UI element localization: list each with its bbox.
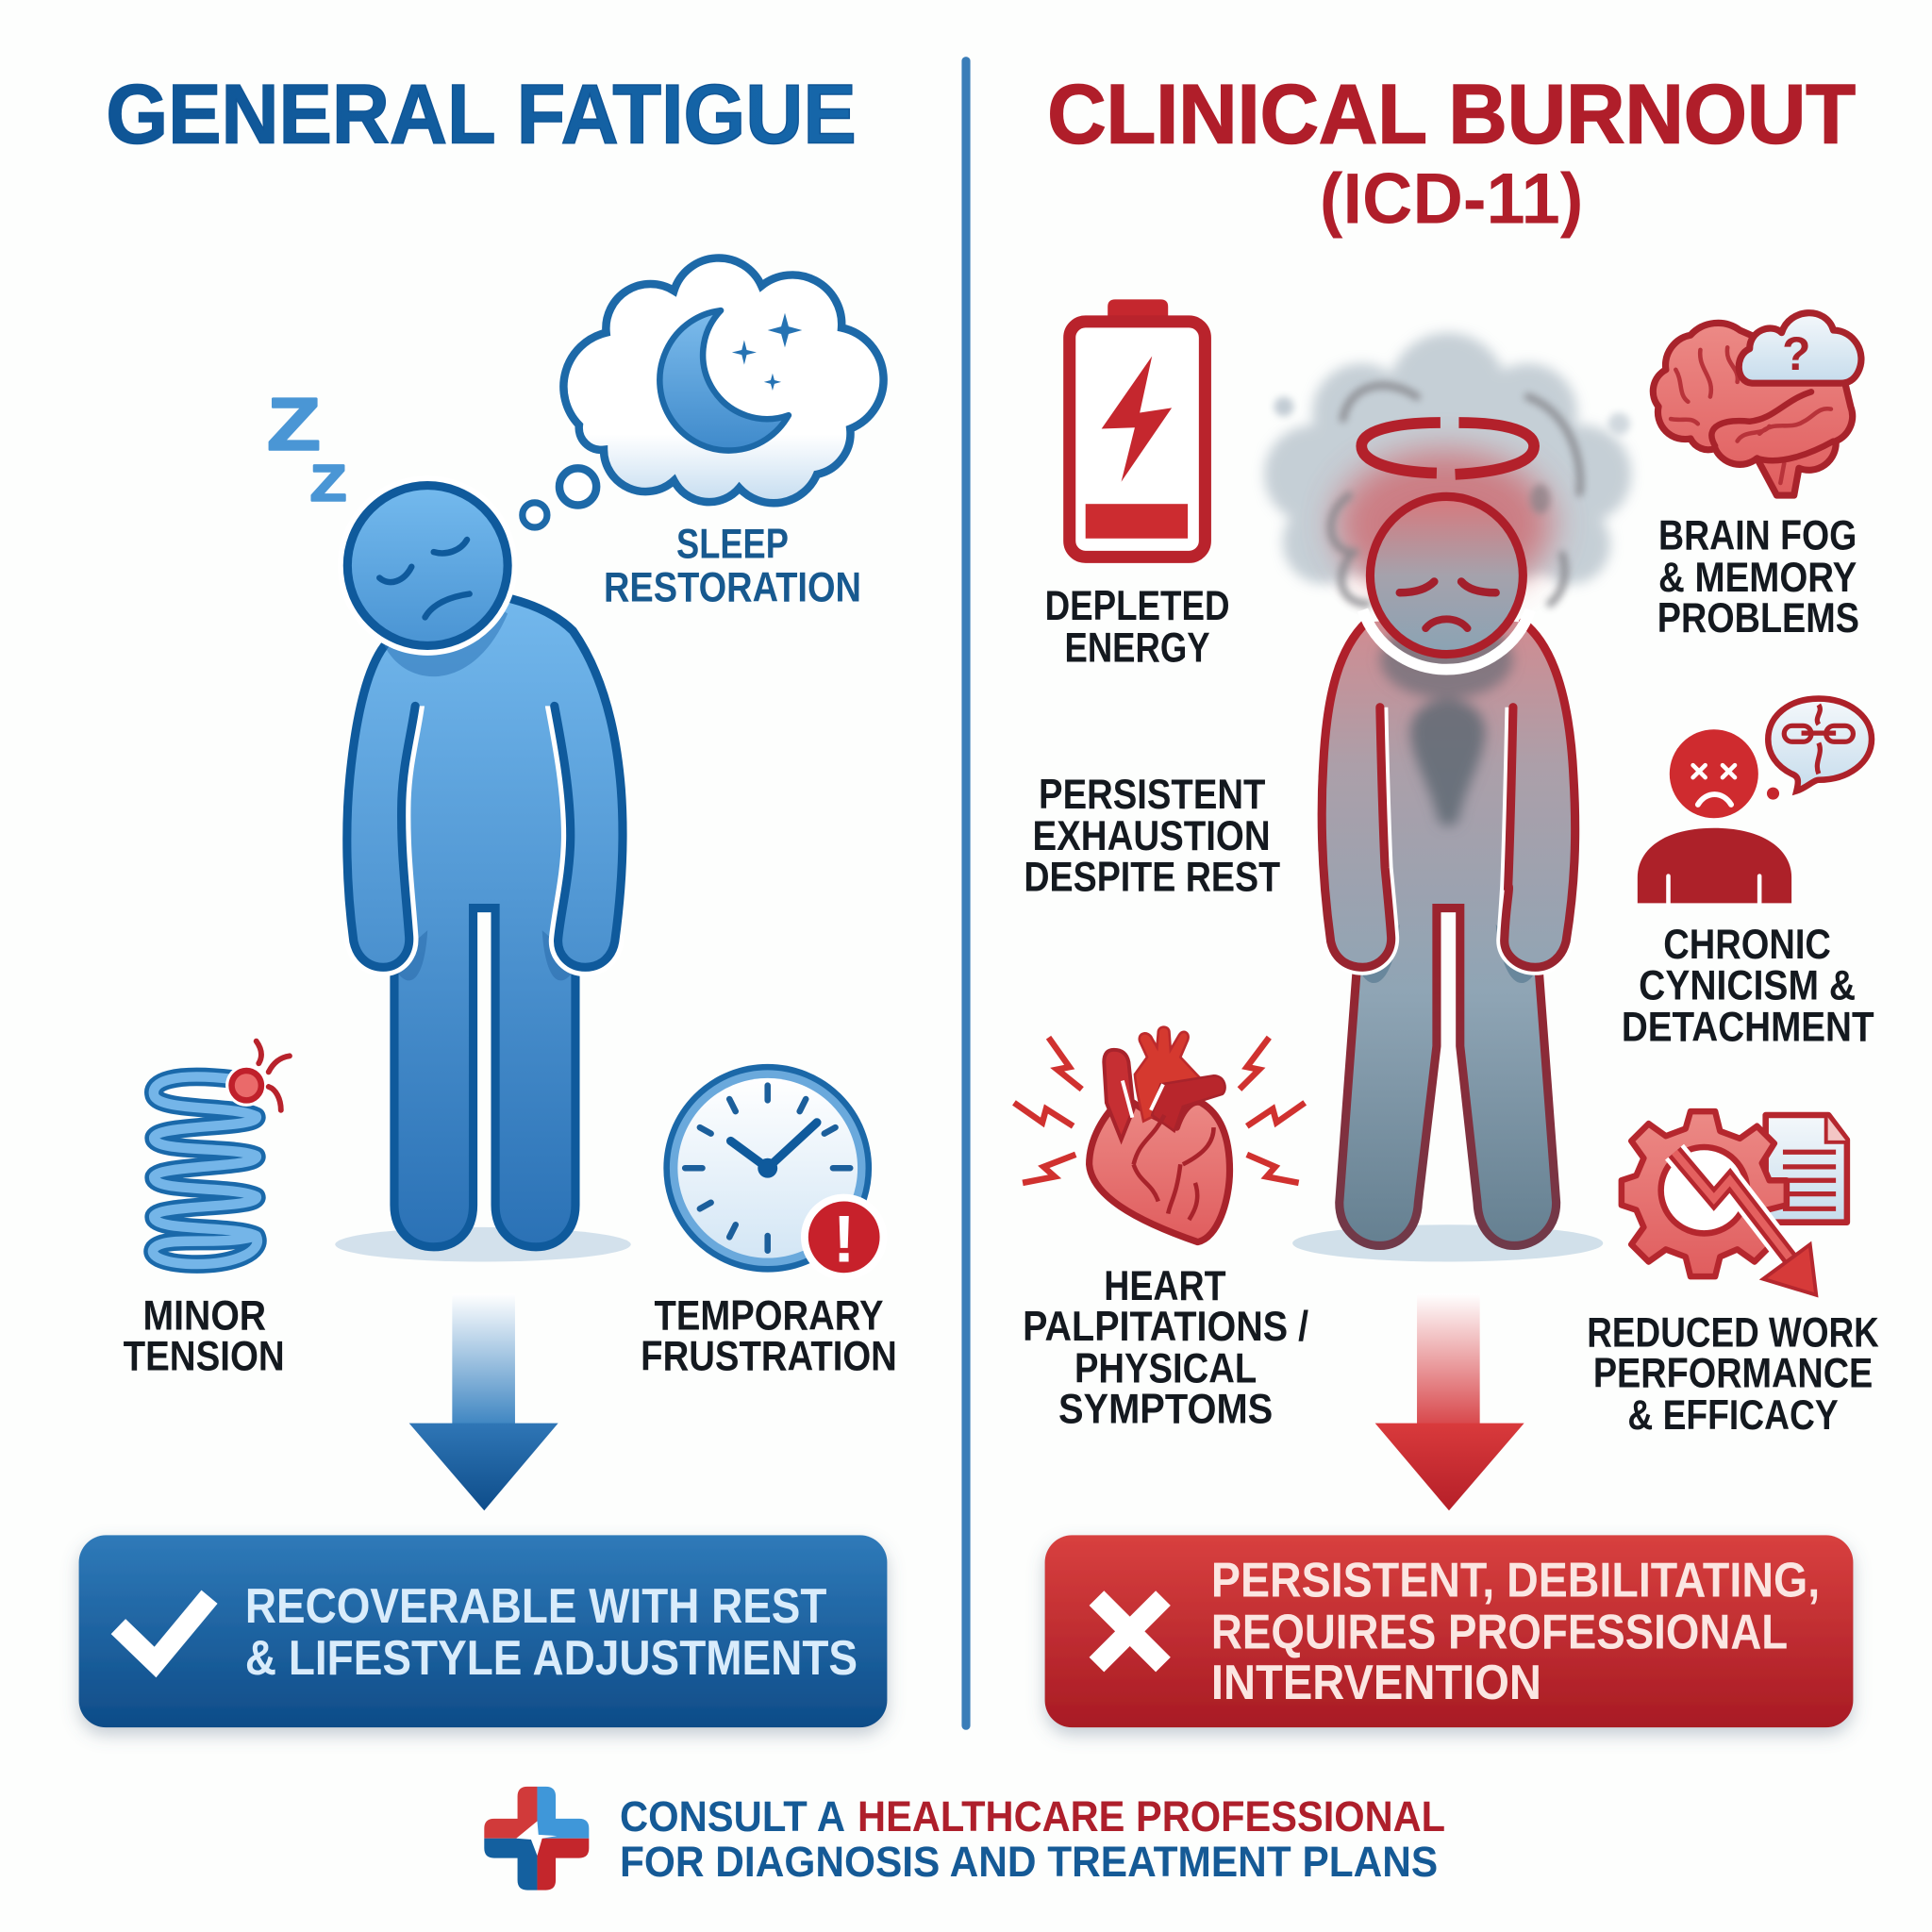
- red tension spot: [225, 1041, 290, 1110]
- head: [338, 475, 518, 656]
- falling arrow: [1674, 1152, 1791, 1260]
- label: persistent exhaustion: EXHAUSTION: [1033, 813, 1271, 859]
- recoverable text: [245, 1579, 858, 1686]
- icon: cynical person with broken chain: [1638, 699, 1872, 903]
- label: temporary frustration: TEMPORARY: [655, 1292, 883, 1339]
- label: persistent exhaustion: PERSISTENT: [1039, 772, 1265, 818]
- label: temporary frustration: FRUSTRATION: [641, 1333, 897, 1379]
- label: chronic cynicism and detachment: [1622, 922, 1874, 1051]
- fog cloud with question mark: ?: [1782, 327, 1810, 380]
- icon: x mark: [1096, 1598, 1163, 1665]
- document: [1766, 1115, 1847, 1223]
- icon: broken gear, document and falling arrow: [1622, 1111, 1847, 1295]
- persistent text: REQUIRES PROFESSIONAL: [1211, 1606, 1788, 1660]
- label: persistent exhaustion: DESPITE REST: [1024, 854, 1280, 900]
- label: heart palpitations: SYMPTOMS: [1058, 1387, 1273, 1433]
- icon: battery: [1070, 299, 1205, 557]
- icon: zzz sleep letters: Z: [267, 383, 321, 466]
- icon: brain with fog: [1653, 313, 1861, 495]
- label: heart palpitations: [1023, 1263, 1308, 1433]
- label: sleep restoration: [604, 522, 861, 610]
- label: brain fog and memory problems: BRAIN FOG: [1658, 513, 1857, 559]
- label: depleted energy: DEPLETED: [1045, 583, 1230, 629]
- label: brain fog and memory problems: [1657, 513, 1859, 641]
- label: depleted energy: ENERGY: [1064, 625, 1210, 671]
- label: brain fog and memory problems: & MEMORY: [1658, 555, 1857, 601]
- label: chronic cynicism and detachment: DETACHMENT: [1622, 1005, 1874, 1051]
- label: reduced work performance: PERFORMANCE: [1593, 1351, 1873, 1397]
- label: chronic cynicism and detachment: CHRONIC: [1663, 922, 1831, 968]
- center divider: [961, 57, 971, 1730]
- label: reduced work performance: [1587, 1310, 1879, 1439]
- spinning ring: [1361, 423, 1534, 475]
- speech bubble: [1768, 699, 1872, 791]
- label: persistent exhaustion: [1024, 772, 1280, 900]
- label: chronic cynicism and detachment: CYNICISM &: [1639, 962, 1856, 1008]
- persistent text: INTERVENTION: [1211, 1656, 1541, 1710]
- title: clinical burnout: [1047, 68, 1856, 239]
- footer text: CONSULT A: [620, 1792, 845, 1840]
- gear: [1622, 1111, 1787, 1276]
- panel: recoverable outcome: [79, 1535, 887, 1727]
- alert badge: !: [833, 1201, 855, 1275]
- label: reduced work performance: & EFFICACY: [1627, 1392, 1839, 1439]
- icon: medical cross: [484, 1787, 589, 1890]
- title: general fatigue: GENERAL FATIGUE: [106, 68, 857, 161]
- footer text: HEALTHCARE PROFESSIONAL: [858, 1792, 1445, 1840]
- label: brain fog and memory problems: PROBLEMS: [1657, 595, 1859, 641]
- figure: fatigued blue person: [338, 475, 623, 1247]
- fog cloud with question mark: [1739, 313, 1861, 383]
- persistent text: [1211, 1554, 1820, 1710]
- icon: check mark: [118, 1597, 209, 1662]
- label: heart palpitations: PHYSICAL: [1074, 1345, 1257, 1391]
- panel: persistent outcome: [1045, 1535, 1853, 1727]
- label: heart palpitations: PALPITATIONS /: [1023, 1304, 1308, 1350]
- alert badge: [801, 1194, 887, 1280]
- label: minor tension: [124, 1292, 285, 1379]
- footer text: [620, 1792, 1445, 1886]
- label: minor tension: MINOR: [143, 1292, 266, 1339]
- blue ground shadow: [335, 1227, 631, 1261]
- footer text: FOR DIAGNOSIS AND TREATMENT PLANS: [620, 1838, 1438, 1886]
- head: [1363, 496, 1530, 670]
- label: minor tension: TENSION: [124, 1333, 285, 1379]
- icon: zzz sleep letters: Z: [310, 456, 346, 511]
- title: clinical burnout: CLINICAL BURNOUT: [1047, 68, 1856, 161]
- icon: anatomical heart with bolts: [1014, 1027, 1305, 1242]
- label: heart palpitations: HEART: [1104, 1263, 1226, 1309]
- arrow: blue down: [409, 1293, 558, 1510]
- icon: sleep thought cloud: [523, 258, 884, 527]
- chest shadow: [1380, 620, 1513, 825]
- label: sleep restoration: SLEEP: [676, 522, 789, 568]
- label: sleep restoration: RESTORATION: [604, 564, 861, 610]
- label: temporary frustration: [641, 1292, 897, 1379]
- recoverable text: & LIFESTYLE ADJUSTMENTS: [245, 1631, 858, 1686]
- title: clinical burnout: (ICD-11): [1320, 158, 1583, 239]
- figure: burned-out person: [1322, 496, 1575, 1245]
- icon: zzz sleep letters: [267, 383, 346, 511]
- recoverable text: RECOVERABLE WITH REST: [245, 1579, 826, 1634]
- fog cloud around head: [1264, 333, 1631, 604]
- icon: clock with alert: [667, 1067, 887, 1280]
- persistent text: PERSISTENT, DEBILITATING,: [1211, 1554, 1820, 1608]
- icon: compressed spring: [153, 1041, 290, 1264]
- label: depleted energy: [1045, 583, 1230, 671]
- arrow: red down: [1375, 1293, 1524, 1510]
- red ground shadow: [1292, 1224, 1603, 1261]
- label: reduced work performance: REDUCED WORK: [1587, 1310, 1879, 1357]
